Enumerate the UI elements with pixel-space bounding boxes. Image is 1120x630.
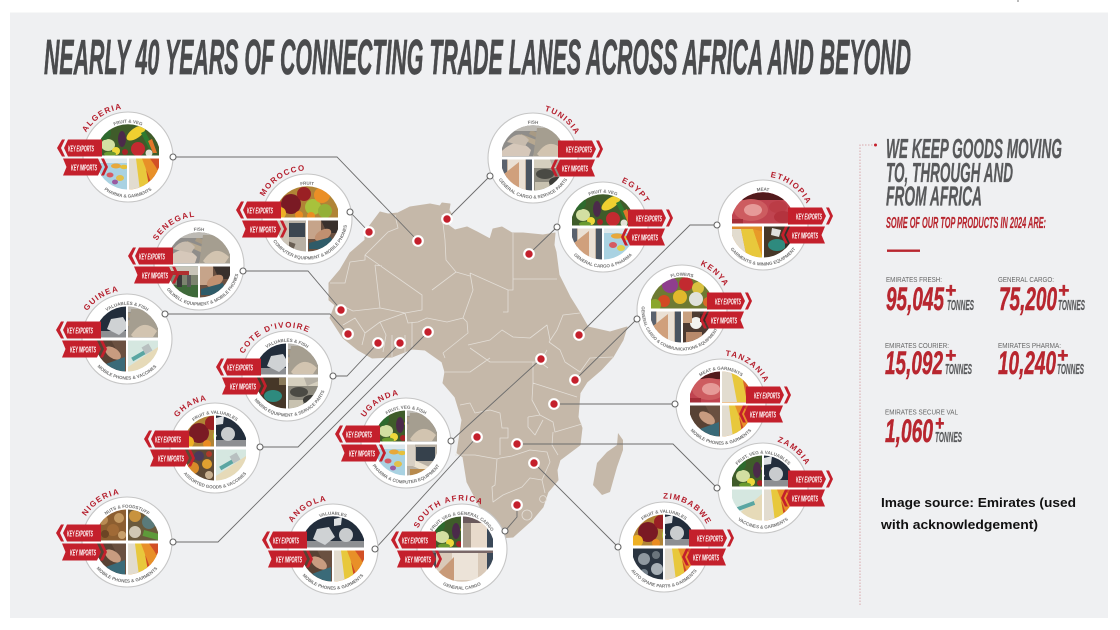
stat: Emirates Courier: 15,092 xyxy=(885,345,943,381)
dotted sidebar rule xyxy=(860,145,875,605)
text: TONNES xyxy=(1057,362,1084,378)
country badge: Tunisia: KEY EXPORTS xyxy=(566,144,592,154)
country badge: Nigeria: NUTS & FOODSTUFF xyxy=(104,504,150,515)
country badge: South Africa xyxy=(391,495,508,594)
map of Africa xyxy=(329,203,627,538)
country badge: Guinea: VALUABLES & FISH xyxy=(105,302,149,312)
country badge: Zimbabwe xyxy=(618,493,734,592)
country badge: Senegal: FISH xyxy=(194,228,204,231)
country badge: Ethiopia: GARMENTS & MINING EQUIPMENT xyxy=(731,247,795,266)
text: TONNES xyxy=(935,430,962,446)
country badge: Algeria: ALGERIA xyxy=(82,104,121,132)
country badge: Cote d'Ivoire: MINING EQUIPMENT & SERVICE PARTS xyxy=(254,390,324,417)
stat: Emirates Secure Val: EMIRATES SECURE VAL xyxy=(885,408,958,416)
country badge: Tunisia: GENERAL CARGO & SERVICE PARTS xyxy=(499,178,567,199)
stat: Emirates Secure Val: 1,060 xyxy=(885,413,933,449)
country badge: Uganda: PHARMA & COMPUTER EQUIPMENT xyxy=(372,464,439,484)
country badge: Nigeria: KEY IMPORTS xyxy=(70,548,96,558)
country badge: Tunisia xyxy=(488,106,603,204)
country badge: Ethiopia: KEY EXPORTS xyxy=(796,212,822,222)
country badge: Morocco: KEY EXPORTS xyxy=(247,206,273,216)
country badge: Egypt: KEY EXPORTS xyxy=(636,214,662,224)
country badge: Guinea: KEY IMPORTS xyxy=(70,344,96,354)
country badge: Algeria xyxy=(57,104,174,202)
country badge: Morocco: MOROCCO xyxy=(260,165,304,196)
image source note: Image source: Emirates (used xyxy=(881,496,1076,510)
country badge: South Africa: KEY IMPORTS xyxy=(405,554,431,564)
country badge: Ghana xyxy=(144,396,260,494)
country badge: Morocco: COMPUTER EQUIPMENT & MOBILE PHONES xyxy=(274,225,347,260)
country badge: Cote d'Ivoire: KEY IMPORTS xyxy=(230,382,256,392)
sidebar heading xyxy=(886,133,1062,212)
country badge: Kenya: FLOWERS xyxy=(670,272,694,278)
country badge: Ghana: KEY IMPORTS xyxy=(158,454,184,464)
country badge: Cote d'Ivoire: KEY EXPORTS xyxy=(227,362,253,372)
text: TONNES xyxy=(947,298,974,314)
country badge: Tanzania xyxy=(676,350,791,450)
image source note: with acknowledgement) xyxy=(880,518,1038,532)
sidebar heading: FROM AFRICA xyxy=(886,180,982,212)
text: TONNES xyxy=(1058,298,1085,314)
country badge: Uganda: KEY EXPORTS xyxy=(346,430,372,440)
country badge: Nigeria xyxy=(56,489,172,588)
country badge: South Africa: GENERAL CARGO xyxy=(442,581,482,591)
country badge: Angola: KEY IMPORTS xyxy=(276,554,302,564)
stat: Emirates Pharma: + xyxy=(1057,345,1068,367)
stat: Emirates Secure Val: + xyxy=(935,413,944,435)
country badge: Egypt: EGYPT xyxy=(622,177,650,202)
country badge: Ghana: FRUIT & VALUABLES xyxy=(192,410,238,421)
country badge: Cote d'Ivoire xyxy=(216,322,332,422)
country badge: Algeria: PHARMA & GARMENTS xyxy=(104,187,152,198)
country badge: Guinea xyxy=(56,286,172,384)
stat: Emirates Courier: EMIRATES COURIER: xyxy=(885,341,949,350)
country badge: Ethiopia: ETHIOPIA xyxy=(770,172,810,204)
country badge: Zambia: VACCINES & GARMENTS xyxy=(738,517,788,529)
country badge: Cote d'Ivoire: VALUABLES & FISH xyxy=(265,338,309,348)
country badge: Tunisia: KEY IMPORTS xyxy=(562,164,588,174)
connector lines xyxy=(165,157,717,549)
country badge: Egypt: FRUIT & VEG xyxy=(588,190,618,196)
country badge: Egypt xyxy=(558,177,673,272)
country badge: Uganda: FRUIT, VEG & FISH xyxy=(385,406,427,414)
country badge: Ethiopia: KEY IMPORTS xyxy=(792,230,818,240)
country badge: Kenya: GENERAL CARGO & COMMUNICATIONS EQUIPMENT xyxy=(642,306,718,351)
country badge: Kenya: KEY EXPORTS xyxy=(715,296,741,306)
country badge: Morocco: KEY IMPORTS xyxy=(250,224,276,234)
country badge: Guinea: GUINEA xyxy=(84,286,118,310)
stat: Emirates Fresh: 95,045 xyxy=(886,281,945,317)
image source note xyxy=(880,496,1076,532)
country badge: Uganda: UGANDA xyxy=(360,390,398,416)
country badge: Angola: KEY EXPORTS xyxy=(273,536,299,546)
country badge: Senegal xyxy=(128,212,244,310)
country badge: Guinea: MOBILE PHONES & VACCINES xyxy=(98,364,156,380)
stat: General Cargo: + xyxy=(1058,280,1069,302)
country badge: Zimbabwe: AUTO SPARE PARTS & GARMENTS xyxy=(630,568,698,589)
country badge: Senegal: KEY EXPORTS xyxy=(139,252,165,262)
country badge: Ghana: GHANA xyxy=(174,396,206,416)
country badge: Kenya xyxy=(636,260,752,356)
map pins xyxy=(336,214,584,510)
country badge: Cote d'Ivoire: COTE D'IVOIRE xyxy=(240,322,310,353)
country badge: Tanzania: TANZANIA xyxy=(726,350,768,382)
country badge: Angola xyxy=(262,496,378,594)
country badge: Zimbabwe: KEY EXPORTS xyxy=(697,534,723,544)
country badge: Zambia: ZAMBIA xyxy=(778,436,810,464)
stat: Emirates Pharma: EMIRATES PHARMA: xyxy=(998,341,1061,350)
stat: General Cargo: GENERAL CARGO: xyxy=(998,275,1054,284)
country badge: Tanzania: MEAT & GARMENTS xyxy=(699,366,743,376)
country badge: South Africa: SOUTH AFRICA xyxy=(406,483,487,531)
map: Madagascar xyxy=(593,433,623,495)
country badge: Tanzania: MOBILE PHONES & GARMENTS xyxy=(690,428,752,445)
country badge: Guinea: KEY EXPORTS xyxy=(67,326,93,336)
country badge: Nigeria: NIGERIA xyxy=(77,483,123,519)
connector end dots xyxy=(162,154,720,552)
country badge: Algeria: KEY EXPORTS xyxy=(68,144,94,154)
country badge: Egypt: GENERAL CARGO & PHARMA xyxy=(574,254,632,268)
map: country borders xyxy=(330,215,613,502)
country badge: Ethiopia: MEAT xyxy=(756,188,770,192)
country badge: Ghana: ASSORTED GOODS & VACCINES xyxy=(184,472,246,489)
map: Lesotho border xyxy=(522,510,532,520)
country badge: Senegal: OILWELL EQUIPMENT & MOBILE PHONES xyxy=(167,274,238,306)
country badge: Senegal: KEY IMPORTS xyxy=(142,270,168,280)
country badge: Zimbabwe: FRUIT & VALUABLES xyxy=(640,509,688,521)
country badge: Angola: ANGOLA xyxy=(284,490,330,526)
stat: Emirates Fresh: EMIRATES FRESH: xyxy=(886,275,942,284)
country badge: Ethiopia xyxy=(718,172,833,270)
country badge: Kenya: KEY IMPORTS xyxy=(711,316,737,326)
country badge: Zambia: KEY EXPORTS xyxy=(796,474,822,484)
map: mainland xyxy=(329,203,627,538)
country badge: Zambia: KEY IMPORTS xyxy=(792,494,818,504)
country badge: Uganda xyxy=(335,390,452,488)
country badge: Uganda: KEY IMPORTS xyxy=(349,448,375,458)
text: TONNES xyxy=(945,362,972,378)
country badge: Tanzania: KEY EXPORTS xyxy=(754,390,780,400)
country badge: Senegal: SENEGAL xyxy=(153,212,194,240)
country badge: Morocco xyxy=(236,165,352,264)
country badge: Tanzania: KEY IMPORTS xyxy=(750,410,776,420)
country badge: Kenya: KENYA xyxy=(700,260,728,286)
stat: Emirates Fresh: + xyxy=(945,280,956,302)
country badge: Angola: MOBILE PHONES & GARMENTS xyxy=(302,573,364,591)
country badge: Nigeria: KEY EXPORTS xyxy=(67,528,93,538)
red rule xyxy=(887,250,920,252)
country badge: Algeria: KEY IMPORTS xyxy=(71,162,97,172)
country badge: Zambia xyxy=(718,436,833,534)
country badge: Ghana: KEY EXPORTS xyxy=(155,434,181,444)
stat: Emirates Pharma: 10,240 xyxy=(998,345,1056,381)
country badge: Angola: VALUABLES xyxy=(318,511,348,518)
country badge: Tunisia: FISH xyxy=(528,120,538,124)
country badge: Egypt: KEY IMPORTS xyxy=(632,232,658,242)
country badge: Zimbabwe: KEY IMPORTS xyxy=(693,552,719,562)
country badge: Zambia: FRUIT, VEG & VALUABLES xyxy=(735,450,790,465)
stat: General Cargo: 75,200 xyxy=(999,281,1057,317)
country badge: Tunisia: TUNISIA xyxy=(546,106,579,134)
country badge: Morocco: FRUIT xyxy=(300,182,314,186)
country badge: South Africa: KEY EXPORTS xyxy=(402,536,428,546)
stat: Emirates Courier: + xyxy=(945,345,956,367)
country badge: South Africa: FRUIT, VEG & GENERAL CARGO xyxy=(429,511,495,532)
country badge: Algeria: FRUIT & VEG xyxy=(113,120,142,126)
sidebar rule dot xyxy=(874,144,877,146)
top edge tick xyxy=(1018,0,1019,2)
country badge: Zimbabwe: ZIMBABWE xyxy=(659,484,718,528)
country badge: Nigeria: MOBILE PHONES & GARMENTS xyxy=(96,566,158,584)
map: Eswatini border xyxy=(540,496,546,502)
